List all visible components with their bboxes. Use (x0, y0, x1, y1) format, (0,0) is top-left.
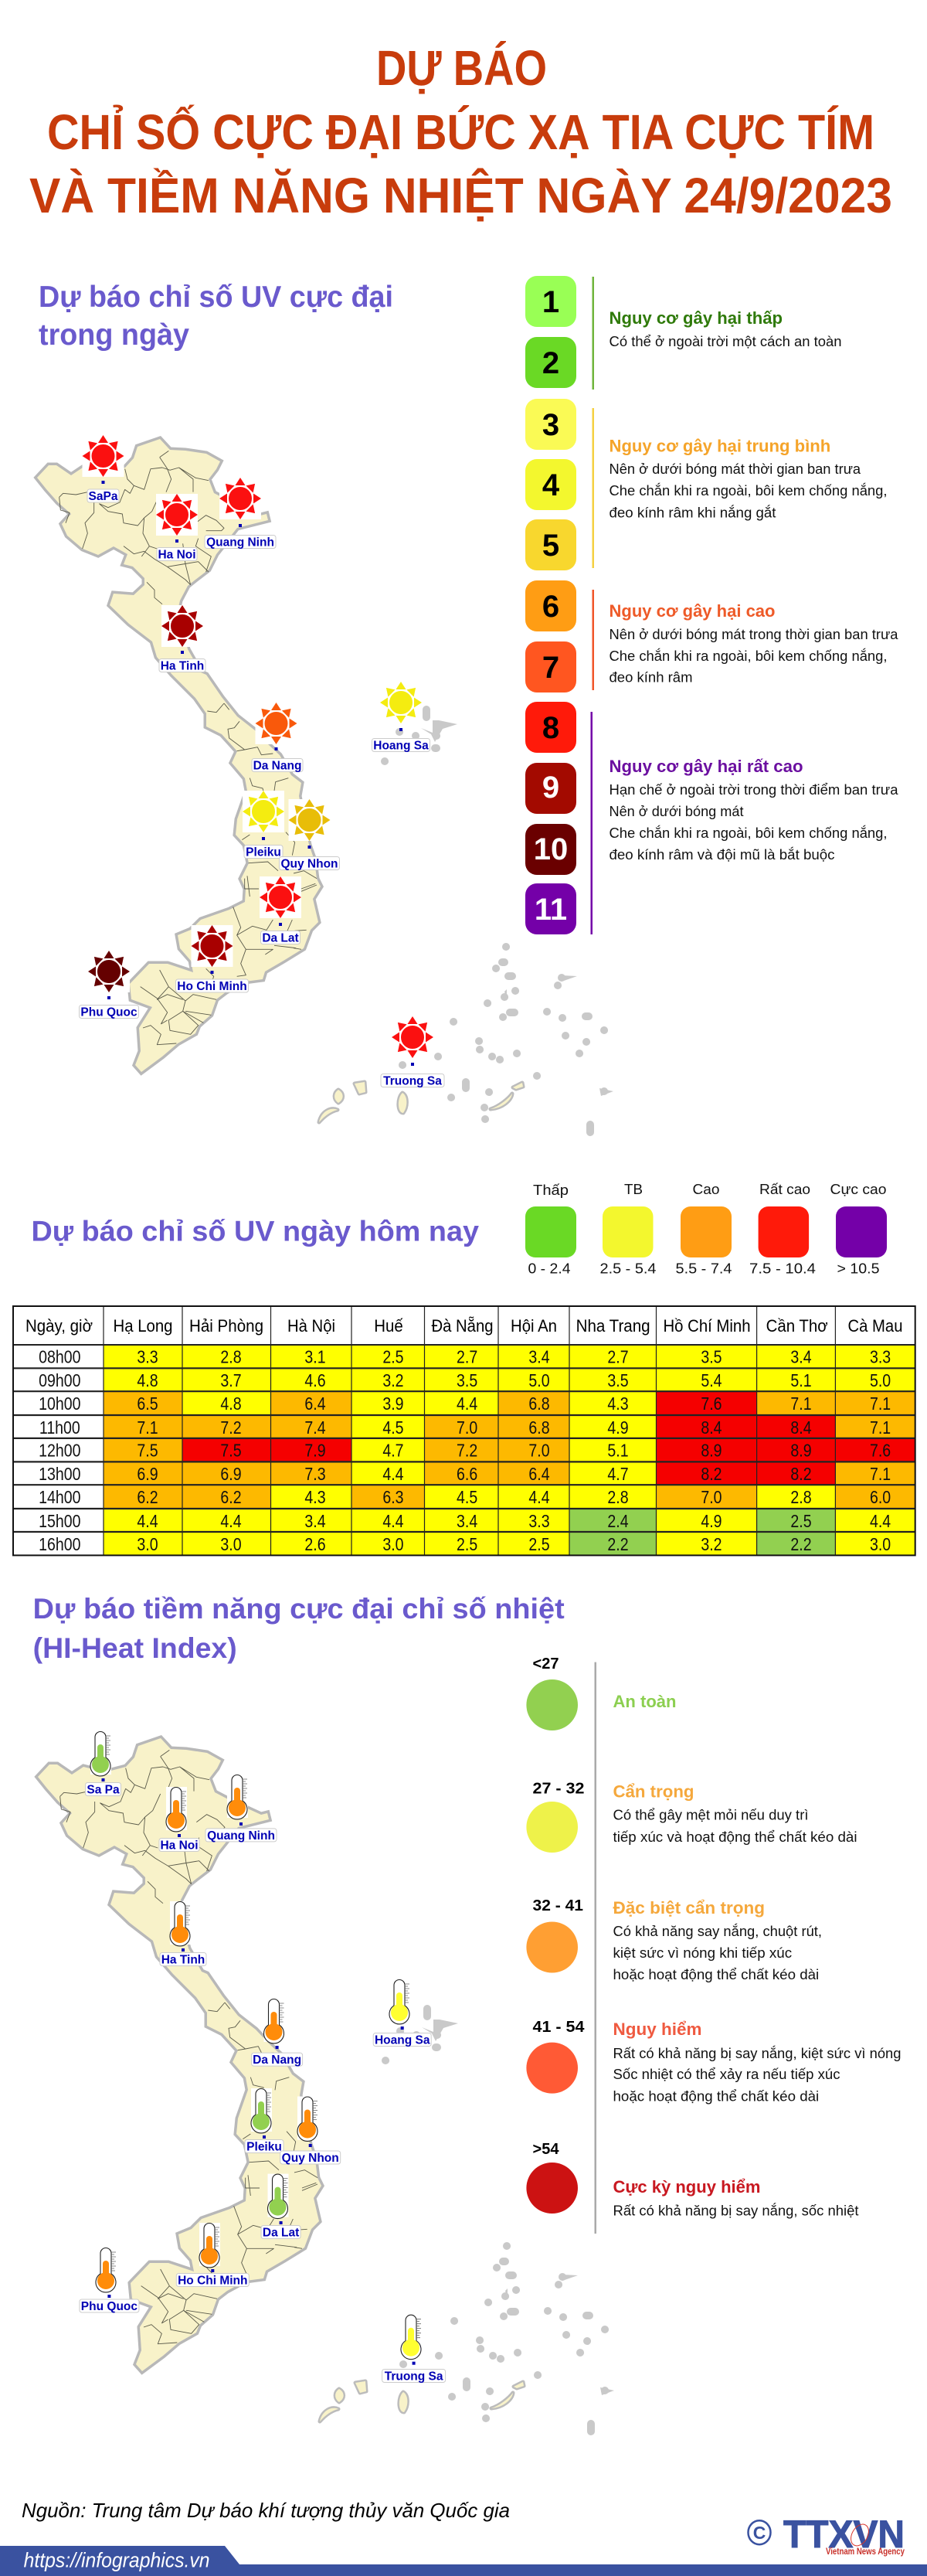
heading: UV forecast map (39, 281, 393, 352)
table values: 2.6 (304, 1535, 326, 1554)
logo: TTXVN: TTXVN (783, 2513, 905, 2556)
scale level 6: 6 (542, 590, 559, 624)
scale level 3 (525, 399, 576, 450)
risk text: high: Nguy cơ gây hại cao (609, 601, 776, 621)
table values: 7.5 (137, 1441, 158, 1461)
marker: Quang Ninh thermometer: Quang Ninh (207, 1829, 275, 1843)
table values: 2.5 (528, 1535, 550, 1554)
heat level: safe: An toàn (613, 1692, 677, 1711)
marker: Ha Noi sun: Ha Noi (158, 549, 196, 561)
table values: 5.0 (528, 1371, 550, 1390)
risk text: high: Che chắn khi ra ngoài, bôi kem chống nắng, (609, 648, 887, 664)
table values: 4.4 (220, 1512, 242, 1531)
marker: Ho Chi Minh sun (176, 925, 249, 993)
table values: 4.4 (528, 1488, 550, 1507)
table values: 6.9 (220, 1465, 242, 1484)
marker: Ha Tinh sun (159, 605, 205, 672)
table values: 3.3 (528, 1512, 550, 1531)
table values: 3.1 (304, 1347, 326, 1367)
marker: Da Nang sun (252, 703, 303, 773)
risk text: moderate: Nên ở dưới bóng mát thời gian ban trưa (609, 461, 861, 477)
table values: 4.9 (607, 1418, 629, 1438)
heading: UV forecast map: trong ngày (39, 318, 189, 352)
legend item: medium (599, 1182, 657, 1277)
marker: Ha Tinh thermometer: Ha Tinh (161, 1954, 205, 1966)
table values: 4.4 (137, 1512, 158, 1531)
table values: 4.6 (304, 1371, 326, 1390)
marker: SaPa sun (82, 435, 124, 503)
table values: 4.8 (137, 1371, 158, 1390)
heat level: danger (526, 2019, 901, 2104)
risk text: low (609, 308, 842, 349)
marker: Quy Nhon sun: Quy Nhon (280, 858, 338, 870)
source note: Nguồn: Trung tâm Dự báo khí tượng thủy văn Quốc gia (22, 2499, 510, 2522)
legend item: very high: Rất cao (759, 1182, 810, 1197)
table header row: Cà Mau (848, 1316, 902, 1336)
scale level 11: 11 (535, 893, 567, 927)
table values: 3.4 (528, 1347, 550, 1367)
heat level: extreme danger: Rất có khả năng bị say nắng, sốc nhiệt (613, 2202, 859, 2218)
scale level 1 (525, 276, 576, 327)
table values: 3.0 (382, 1535, 404, 1554)
table values: 4.7 (382, 1441, 404, 1461)
heat level: danger: Rất có khả năng bị say nắng, kiệt sức vì nóng (613, 2045, 901, 2061)
table values: 13h00 (39, 1465, 81, 1484)
table: hourly UV forecast by city (13, 1306, 915, 1555)
scale level 8: 8 (542, 711, 559, 745)
title: VÀ TIỀM NĂNG NHIỆT NGÀY 24/9/2023 (29, 167, 892, 223)
legend item: low (525, 1183, 576, 1277)
marker: Truong Sa sun (381, 1016, 444, 1088)
heading: heat index (33, 1593, 565, 1664)
table values: 2.2 (790, 1535, 812, 1554)
table values: 8.9 (701, 1441, 722, 1461)
table values: 6.9 (137, 1465, 158, 1484)
heading: UV today: Dự báo chỉ số UV ngày hôm nay (31, 1215, 479, 1247)
risk text: very high (609, 757, 899, 863)
heat level: danger: hoặc hoạt động thể chất kéo dài (613, 2088, 819, 2104)
risk text: very high: Nên ở dưới bóng mát (609, 804, 743, 819)
marker: Sa Pa thermometer: Sa Pa (87, 1784, 120, 1796)
table values: 4.4 (870, 1512, 891, 1531)
heat level: danger: Sốc nhiệt có thể xảy ra nếu tiếp xúc (613, 2067, 840, 2082)
scale level 5 (525, 519, 576, 570)
marker: Phu Quoc thermometer (80, 2248, 139, 2313)
scale level 3: 3 (542, 408, 559, 442)
scale level 9: 9 (542, 771, 559, 805)
table values: 4.3 (607, 1394, 629, 1414)
marker: Pleiku thermometer: Pleiku (246, 2141, 282, 2153)
table values: 2.5 (457, 1535, 477, 1554)
table values: 3.7 (220, 1371, 242, 1390)
panel: UV scale legend (525, 276, 899, 934)
scale level 9 (525, 763, 576, 814)
table values: 2.7 (607, 1347, 629, 1367)
marker: Hoang Sa thermometer: Hoang Sa (375, 2034, 430, 2047)
scale level 4: 4 (542, 468, 560, 502)
table values: 7.5 (220, 1441, 242, 1461)
table values: 08h00 (39, 1347, 81, 1367)
heat level: caution (526, 1781, 857, 1853)
legend item: very high (749, 1182, 816, 1277)
table values: 3.9 (382, 1394, 404, 1414)
table values: 4.4 (382, 1512, 404, 1531)
table values: 12h00 (39, 1441, 81, 1461)
table header row: Nha Trang (576, 1316, 650, 1336)
risk text: low: Có thể ở ngoài trời một cách an toàn (609, 334, 842, 349)
table header row: Ngày, giờ (25, 1316, 93, 1336)
table values: 5.0 (870, 1371, 891, 1390)
footer band with website (0, 2546, 927, 2576)
marker: Quang Ninh thermometer (205, 1775, 277, 1843)
marker: Ho Chi Minh thermometer (176, 2223, 249, 2288)
legend item: extreme: Cực cao (830, 1182, 887, 1197)
table values: 3.4 (457, 1512, 477, 1531)
table values: 7.0 (528, 1441, 550, 1461)
panel: heat index legend (526, 1656, 901, 2234)
table values: 8.9 (790, 1441, 812, 1461)
table header row: Hạ Long (113, 1316, 173, 1336)
marker: Da Lat thermometer: Da Lat (263, 2226, 299, 2240)
marker: Sa Pa thermometer (85, 1731, 121, 1796)
table values: 6.8 (528, 1418, 550, 1438)
footer band with website: https://infographics.vn (24, 2549, 210, 2572)
scale level 2: 2 (542, 346, 559, 380)
table values: 4.5 (457, 1488, 477, 1507)
marker: Da Lat sun (260, 876, 301, 944)
logo: TTXVN: Vietnam News Agency (826, 2546, 905, 2557)
risk text: moderate (609, 436, 887, 521)
marker: SaPa sun: SaPa (89, 490, 118, 503)
legend item: very high: 7.5 - 10.4 (749, 1261, 816, 1277)
table values: 4.4 (382, 1465, 404, 1484)
table values: 4.5 (382, 1418, 404, 1438)
heat level: extreme caution: kiệt sức vì nóng khi tiếp xúc (613, 1945, 792, 1961)
marker: Hoang Sa sun (372, 682, 430, 753)
marker: Ha Noi thermometer: Ha Noi (160, 1839, 199, 1852)
marker: Phu Quoc sun: Phu Quoc (80, 1006, 138, 1019)
risk text: high: Nên ở dưới bóng mát trong thời gian ban trưa (609, 627, 898, 642)
legend item: low: Thấp (533, 1183, 569, 1198)
table values: 4.4 (457, 1394, 477, 1414)
scale level 7 (525, 641, 576, 692)
marker: Da Lat sun: Da Lat (262, 932, 299, 944)
table values: 3.2 (382, 1371, 404, 1390)
table values: 2.2 (607, 1535, 629, 1554)
legend item: extreme: > 10.5 (837, 1261, 879, 1277)
risk text: moderate: Che chắn khi ra ngoài, bôi kem chống nắng, (609, 482, 887, 499)
marker: Quy Nhon thermometer (280, 2096, 341, 2165)
table values: 10h00 (39, 1394, 81, 1414)
heading: UV forecast map: Dự báo chỉ số UV cực đại (39, 281, 393, 314)
table values: 6.3 (382, 1488, 404, 1507)
table header row: Hải Phòng (189, 1316, 263, 1336)
map: Vietnam outline and islands (37, 439, 613, 1132)
table values: 2.8 (220, 1347, 242, 1367)
heat level: caution: Có thể gây mệt mỏi nếu duy trì (613, 1808, 808, 1823)
legend: UV categories (525, 1182, 887, 1277)
scale level 7: 7 (542, 651, 559, 685)
table values: 7.2 (220, 1418, 242, 1438)
heat level: safe (526, 1656, 677, 1730)
table values: 16h00 (39, 1535, 81, 1554)
table values: 6.2 (137, 1488, 158, 1507)
risk text: moderate: đeo kính râm khi nắng gắt (609, 504, 776, 521)
legend item: low: 0 - 2.4 (528, 1261, 570, 1277)
table values: 2.5 (382, 1347, 404, 1367)
table values: 7.1 (870, 1418, 891, 1438)
table values: 6.4 (528, 1465, 550, 1484)
risk text: very high: Che chắn khi ra ngoài, bôi kem chống nắng, (609, 825, 887, 841)
table values: 7.1 (870, 1465, 891, 1484)
table values: 2.4 (607, 1512, 629, 1531)
table values: 3.4 (790, 1347, 812, 1367)
table values: 11h00 (39, 1418, 80, 1438)
scale level 10: 10 (534, 832, 568, 866)
scale level 6 (525, 580, 576, 631)
table values: 7.6 (701, 1394, 722, 1414)
table header row: Hà Nội (287, 1316, 335, 1336)
table values: 3.5 (701, 1347, 722, 1367)
legend item: extreme (830, 1182, 887, 1277)
table header row: Đà Nẵng (431, 1316, 493, 1336)
risk text: moderate: Nguy cơ gây hại trung bình (609, 436, 830, 456)
marker: Pleiku sun: Pleiku (246, 846, 281, 859)
heat level: extreme caution: 32 - 41 (533, 1897, 583, 1914)
heat level: safe: <27 (533, 1656, 559, 1673)
table values (39, 1347, 891, 1554)
table values: 3.0 (870, 1535, 891, 1554)
marker: Quy Nhon thermometer: Quy Nhon (282, 2152, 339, 2165)
heat level: danger: 41 - 54 (533, 2019, 585, 2036)
table values: 7.1 (870, 1394, 891, 1414)
legend item: medium: TB (624, 1182, 643, 1197)
marker: Da Nang sun: Da Nang (253, 759, 301, 773)
legend item: high (675, 1182, 732, 1277)
marker: Phu Quoc thermometer: Phu Quoc (81, 2300, 138, 2313)
marker: Pleiku thermometer (245, 2088, 284, 2153)
table values: 3.0 (137, 1535, 158, 1554)
table values: 7.9 (304, 1441, 326, 1461)
heat level: extreme caution: Đặc biệt cẩn trọng (613, 1898, 765, 1918)
heat level: extreme danger: Cực kỳ nguy hiểm (613, 2177, 760, 2197)
table values: 6.6 (457, 1465, 477, 1484)
map: Vietnam outline and islands (38, 1738, 614, 2431)
marker: Hoang Sa sun: Hoang Sa (373, 739, 429, 753)
scale level 2 (525, 337, 576, 388)
table values: 4.8 (220, 1394, 242, 1414)
table values: 4.7 (607, 1465, 629, 1484)
table header row: Hội An (511, 1316, 557, 1336)
panel: heat index map of Vietnam (38, 1731, 614, 2431)
table values: 14h00 (39, 1488, 81, 1507)
table values: 3.0 (220, 1535, 242, 1554)
table values: 2.8 (607, 1488, 629, 1507)
table values: 5.1 (790, 1371, 812, 1390)
table values: 4.9 (701, 1512, 722, 1531)
scale level 1: 1 (542, 285, 559, 319)
table values: 7.0 (457, 1418, 477, 1438)
table values: 3.5 (457, 1371, 477, 1390)
table values: 8.2 (701, 1465, 722, 1484)
table values: 7.2 (457, 1441, 477, 1461)
table values: 7.4 (304, 1418, 326, 1438)
table values: 6.8 (528, 1394, 550, 1414)
marker: Quang Ninh sun (205, 478, 276, 549)
table values: 15h00 (39, 1512, 81, 1531)
table values: 3.3 (137, 1347, 158, 1367)
table values: 6.4 (304, 1394, 326, 1414)
marker: Truong Sa thermometer: Truong Sa (385, 2370, 443, 2384)
table values: 09h00 (39, 1371, 81, 1390)
table header row: Cần Thơ (766, 1316, 828, 1336)
logo: TTXVN: C (753, 2523, 766, 2543)
table values: 7.0 (701, 1488, 722, 1507)
marker: Ha Tinh sun: Ha Tinh (161, 660, 204, 672)
heat level: danger: Nguy hiểm (613, 2020, 701, 2039)
heat level: caution: Cẩn trọng (613, 1782, 694, 1802)
risk text: very high: đeo kính râm và đội mũ là bắt buộc (609, 846, 834, 863)
table header row (25, 1316, 902, 1336)
marker: Da Nang thermometer (252, 1999, 303, 2067)
risk text: low: Nguy cơ gây hại thấp (609, 308, 783, 328)
heat level: caution: 27 - 32 (533, 1781, 584, 1798)
table values: 7.6 (870, 1441, 891, 1461)
marker: Ha Noi thermometer (159, 1787, 199, 1852)
heat level: extreme caution: hoặc hoạt động thể chất kéo dài (613, 1967, 819, 1982)
heat level: extreme caution (526, 1897, 822, 1982)
marker: Ha Noi sun (156, 494, 198, 561)
heat level: caution: tiếp xúc và hoạt động thể chất kéo dài (613, 1829, 857, 1845)
heading: heat index: Dự báo tiềm năng cực đại chỉ số nhiệt (33, 1593, 565, 1625)
marker: Truong Sa thermometer (382, 2315, 446, 2384)
table values: 6.0 (870, 1488, 891, 1507)
table values: 3.4 (304, 1512, 326, 1531)
marker: Da Lat thermometer (261, 2174, 301, 2240)
legend item: high: 5.5 - 7.4 (675, 1261, 732, 1277)
marker: Ho Chi Minh sun: Ho Chi Minh (177, 980, 247, 993)
table values: 8.4 (701, 1418, 722, 1438)
table values: 2.5 (790, 1512, 812, 1531)
table values: 6.2 (220, 1488, 242, 1507)
scale level 10 (525, 824, 576, 875)
marker: Quy Nhon sun (280, 799, 340, 870)
table values: 2.8 (790, 1488, 812, 1507)
table values: 7.1 (137, 1418, 158, 1438)
table values: 8.2 (790, 1465, 812, 1484)
table values: 7.1 (790, 1394, 812, 1414)
heading: heat index: (HI-Heat Index) (33, 1632, 237, 1664)
marker: Phu Quoc sun (79, 951, 139, 1019)
panel: UV map of Vietnam (37, 435, 613, 1132)
risk text: high (609, 601, 898, 685)
table values: 8.4 (790, 1418, 812, 1438)
title (29, 40, 892, 223)
marker: Quang Ninh sun: Quang Ninh (206, 536, 274, 549)
scale level 8 (525, 702, 576, 753)
risk text: high: đeo kính râm (609, 669, 692, 685)
scale level 4 (525, 459, 576, 510)
risk text: very high: Hạn chế ở ngoài trời trong thời điểm ban trưa (609, 782, 899, 798)
title: DỰ BÁO (376, 40, 547, 96)
heat level: extreme caution: Có khả năng say nắng, chuột rút, (613, 1923, 822, 1939)
table header row: Hồ Chí Minh (663, 1316, 751, 1336)
legend item: medium: 2.5 - 5.4 (599, 1261, 657, 1277)
table values: 6.5 (137, 1394, 158, 1414)
marker: Pleiku sun (243, 791, 284, 859)
marker: Hoang Sa thermometer (373, 1979, 431, 2047)
heat level: extreme danger (526, 2141, 859, 2218)
table values: 3.5 (607, 1371, 629, 1390)
table values: 7.3 (304, 1465, 326, 1484)
risk text: very high: Nguy cơ gây hại rất cao (609, 757, 803, 776)
table values: 5.1 (607, 1441, 629, 1461)
marker: Da Nang thermometer: Da Nang (253, 2054, 301, 2067)
marker: Ho Chi Minh thermometer: Ho Chi Minh (178, 2274, 248, 2288)
heat level: extreme danger: >54 (533, 2141, 559, 2158)
scale level 11 (525, 883, 576, 934)
scale level 5: 5 (542, 529, 559, 563)
legend item: high: Cao (692, 1182, 720, 1197)
marker: Ha Tinh thermometer (160, 1901, 206, 1966)
table values: 2.7 (457, 1347, 477, 1367)
table values: 3.3 (870, 1347, 891, 1367)
table values: 3.2 (701, 1535, 722, 1554)
table header row: Huế (374, 1316, 403, 1336)
marker: Truong Sa sun: Truong Sa (383, 1074, 442, 1088)
table values: 5.4 (701, 1371, 722, 1390)
table values: 4.3 (304, 1488, 326, 1507)
